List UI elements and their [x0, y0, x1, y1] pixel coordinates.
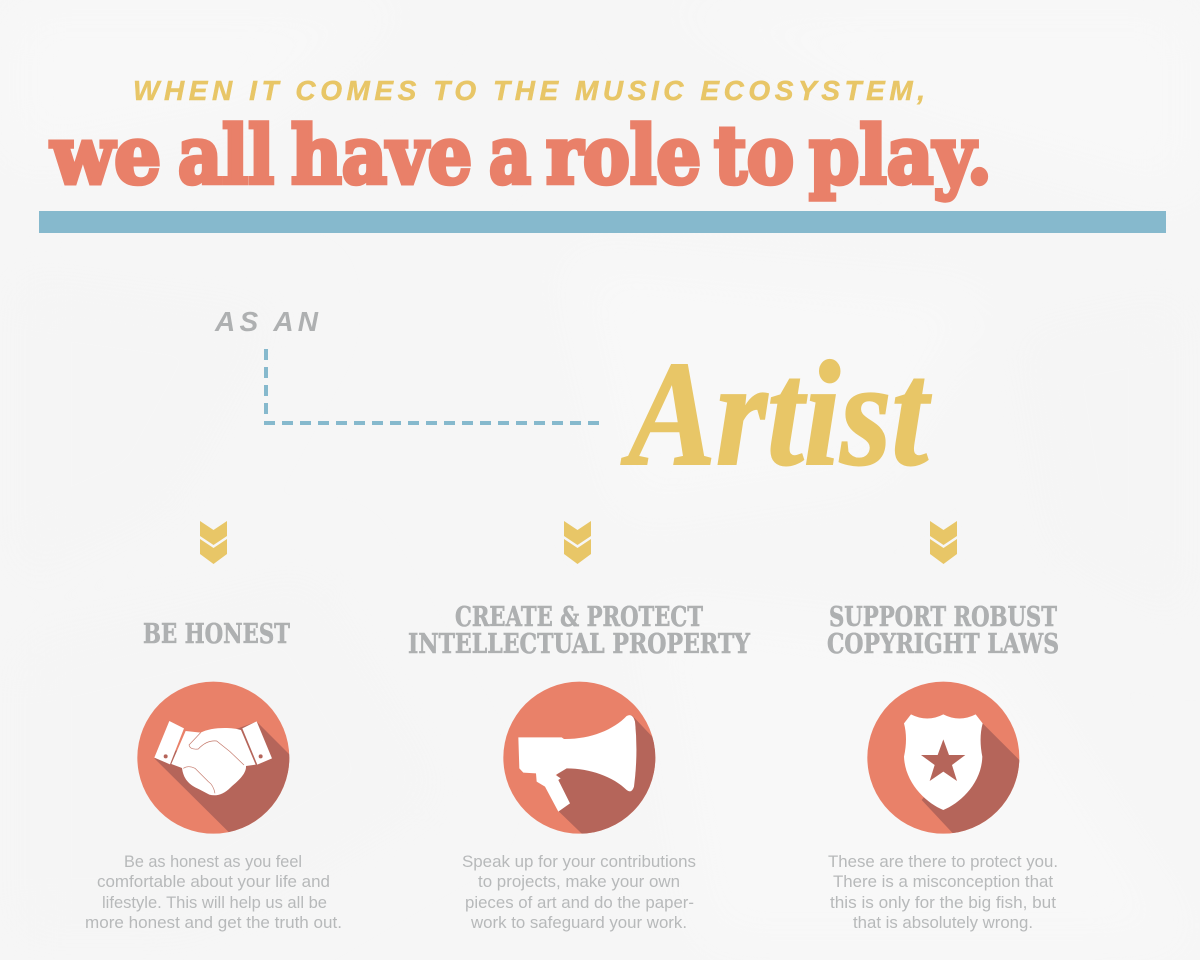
body text: support copyright laws: that is absolutely wrong.	[853, 913, 1033, 932]
main title: all	[178, 108, 274, 202]
chevron icon 3	[930, 521, 957, 564]
heading: support robust: SUPPORT ROBUST	[829, 602, 1057, 633]
body text: be honest: comfortable about your life and	[97, 872, 330, 891]
heading: be honest: BE HONEST	[143, 619, 290, 650]
main title: we	[50, 108, 161, 202]
body text: create and protect	[462, 852, 696, 932]
header kicker: WHEN IT COMES TO THE MUSIC ECOSYSTEM,	[133, 75, 925, 106]
body text: create and protect: work to safeguard your work.	[470, 913, 687, 932]
column: create and protect	[408, 521, 751, 932]
artist heading: Artist	[621, 331, 932, 497]
title rule	[39, 211, 1166, 233]
body text: be honest	[85, 852, 342, 932]
body text: support copyright laws: There is a misconception that	[833, 872, 1053, 891]
heading: create and protect: INTELLECTUAL PROPERTY	[408, 629, 751, 660]
body text: support copyright laws: These are there to protect you.	[828, 852, 1058, 871]
heading: create and protect: CREATE & PROTECT	[455, 602, 703, 633]
body text: be honest: Be as honest as you feel	[124, 852, 302, 871]
body text: create and protect: Speak up for your contributions	[462, 852, 696, 871]
as an label: AS AN	[214, 306, 319, 337]
heading: support robust: COPYRIGHT LAWS	[827, 629, 1059, 660]
column: be honest	[85, 521, 342, 932]
dashed connector	[266, 349, 600, 423]
chevron icon 2	[564, 521, 591, 564]
body text: create and protect: pieces of art and do the paper-	[465, 893, 694, 912]
main title: play.	[809, 108, 992, 202]
body text: support copyright laws: this is only for the big fish, but	[830, 893, 1056, 912]
icon: handshake	[137, 682, 297, 837]
chevron icon 1	[200, 521, 227, 564]
body text: be honest: more honest and get the truth out.	[85, 913, 342, 932]
main title: role	[546, 108, 701, 202]
body text: be honest: lifestyle. This will help us all be	[102, 893, 327, 912]
heading: create and protect	[408, 602, 751, 660]
main title: a	[489, 108, 531, 202]
main title	[50, 108, 992, 202]
body text: support copyright laws	[828, 852, 1058, 932]
main title: to	[714, 108, 794, 202]
icon: shield badge	[867, 682, 1027, 837]
body text: create and protect: to projects, make your own	[478, 872, 680, 891]
icon: megaphone	[503, 682, 663, 840]
column: support copyright laws	[827, 521, 1059, 932]
main title: have	[291, 108, 472, 202]
heading: support robust	[827, 602, 1059, 660]
